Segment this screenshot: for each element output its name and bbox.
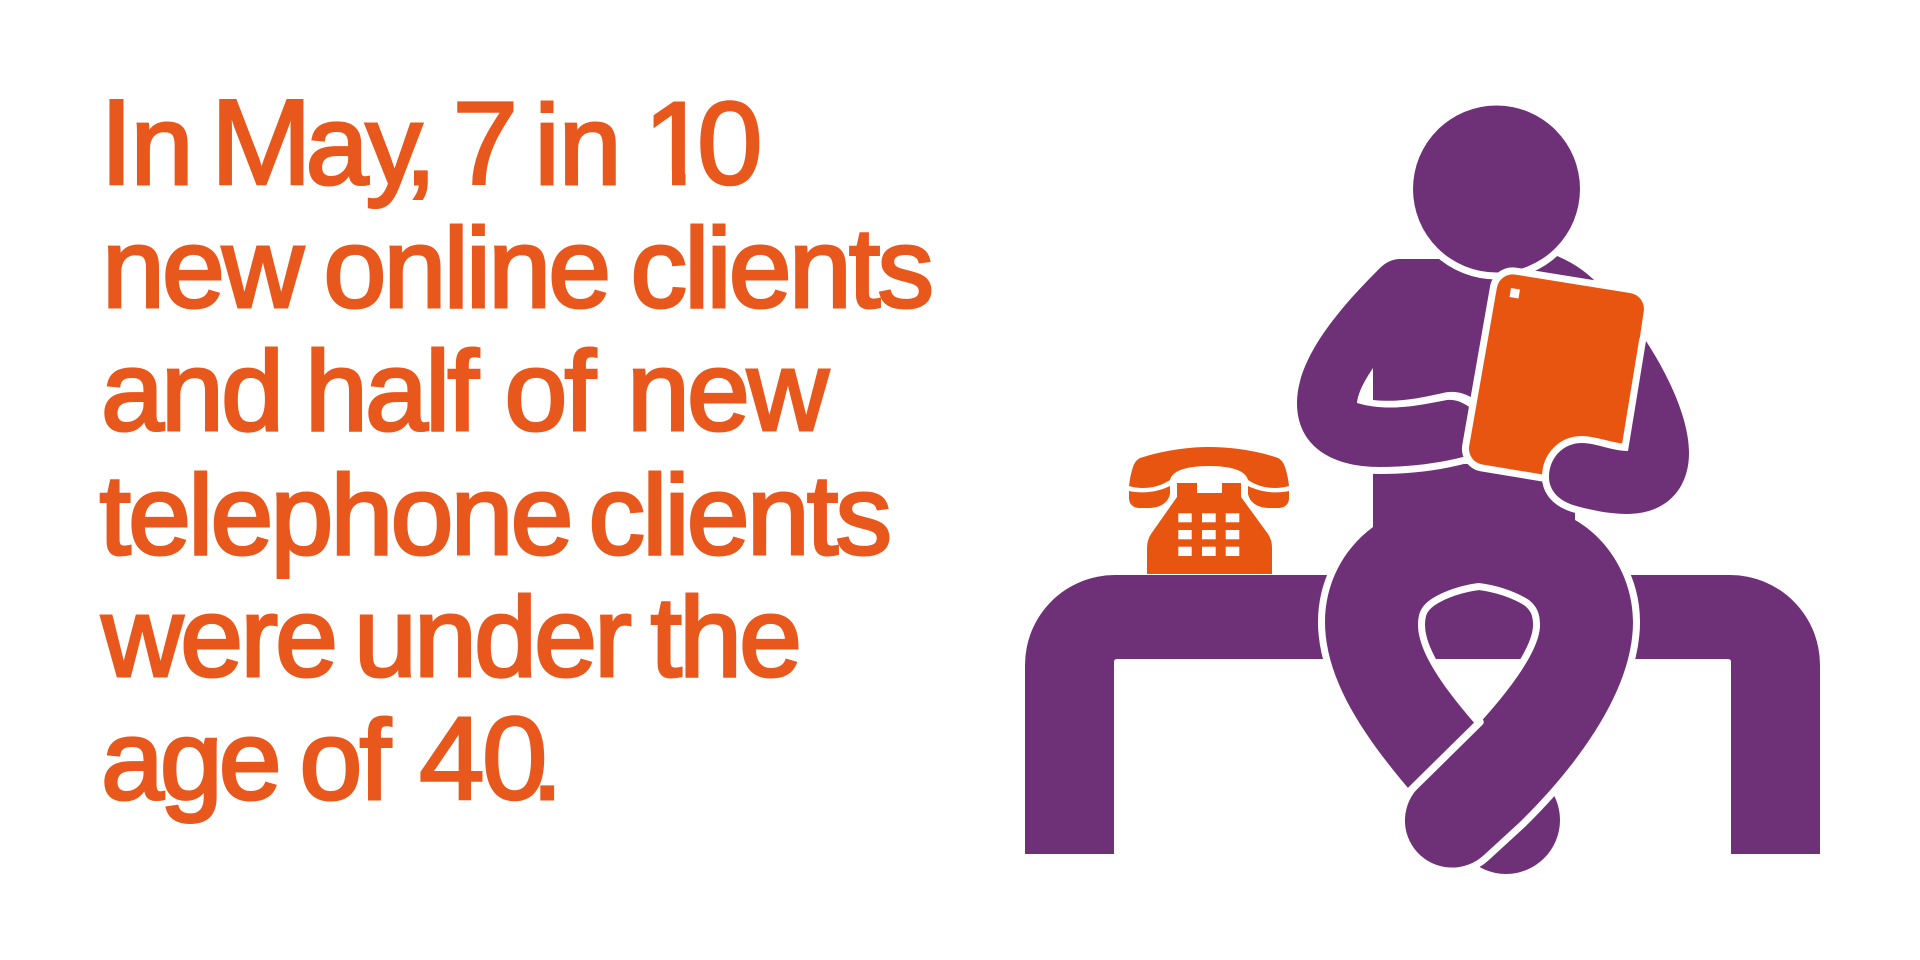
torso and left arm — [1297, 259, 1510, 467]
headline text: 40 — [419, 693, 545, 825]
headline text: telephone — [100, 452, 571, 578]
leg crossing gap — [1408, 722, 1480, 793]
headline text: of — [300, 697, 392, 823]
headline text — [100, 74, 931, 825]
illustration: person on bench with phone — [1025, 106, 1820, 874]
headline text: 0 — [697, 78, 760, 210]
headline text: age — [101, 697, 278, 823]
left arm notch — [1357, 368, 1474, 409]
head — [1413, 106, 1580, 272]
headline text: I — [100, 74, 131, 210]
clipboard hole — [1510, 288, 1520, 298]
back foot — [1452, 766, 1560, 874]
headline text: new — [102, 205, 304, 331]
headline text: new — [627, 328, 829, 454]
headline text: and — [101, 328, 281, 454]
headline text: 1 — [644, 78, 706, 210]
headline text: online — [324, 205, 608, 331]
headline text: ay — [306, 82, 423, 208]
headline text: in — [534, 82, 621, 208]
headline text: the — [650, 574, 799, 700]
headline text: n — [131, 82, 191, 208]
headline text: 7 — [452, 78, 515, 210]
bench — [1025, 575, 1820, 854]
headline text: under — [354, 574, 630, 700]
headline text: half — [305, 328, 479, 454]
clipboard — [1469, 274, 1644, 487]
headline text: clients — [630, 205, 931, 331]
right arm and hand — [1549, 341, 1689, 514]
right shoulder — [1530, 250, 1597, 283]
headline text: of — [504, 328, 597, 454]
headline text: M — [210, 74, 309, 210]
headline text: , — [405, 82, 434, 208]
headline text: clients — [588, 452, 889, 578]
headline text: were — [100, 574, 335, 700]
icon: telephone — [1129, 447, 1289, 574]
headline text: . — [532, 697, 560, 823]
hips and crossed legs — [1325, 440, 1633, 868]
